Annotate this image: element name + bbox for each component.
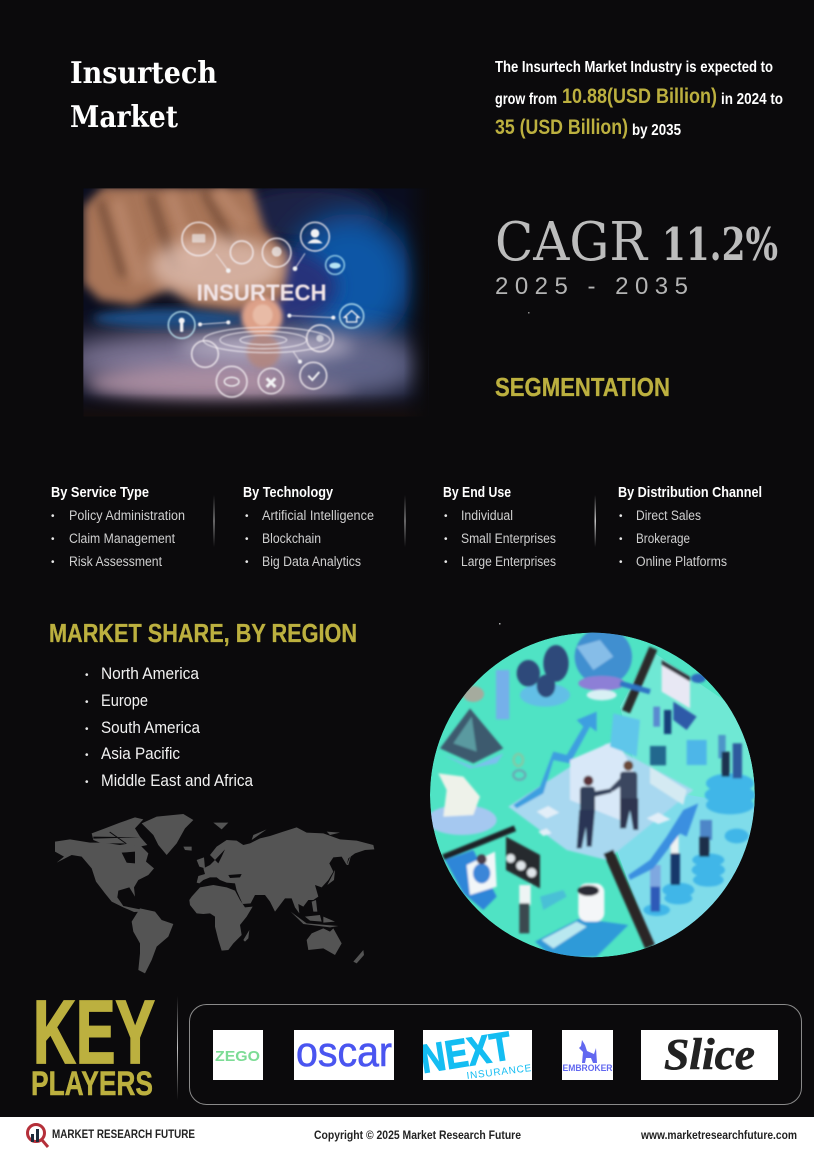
segmentation column: end use: Individual [461,508,513,523]
logo: Next Insurance: INSURANCE [466,1063,532,1082]
bottom-left panels [445,850,497,910]
logo: Slice: Slice [664,1030,755,1079]
world map [55,814,374,973]
people on coins [718,735,726,758]
region list [85,664,253,790]
segmentation column: service type: By Service Type [51,484,149,501]
segmentation column: service type: • [51,511,55,522]
market forecast text: 35 (USD Billion) [495,116,628,139]
logo: Zego [213,1030,263,1080]
segmentation column: technology: Big Data Analytics [262,554,361,569]
logo: Slice [641,1030,778,1080]
region list: North America [101,664,199,683]
handshake figures [580,787,595,813]
footer logo icon [28,1124,48,1147]
small specks [499,623,500,624]
segmentation column: service type: • [51,534,55,545]
mountain [440,708,503,763]
market forecast text: grow from [495,91,557,108]
segmentation column: distribution channel [618,484,762,569]
photo: insurtech hand with icons [57,183,428,417]
segmentation column: distribution channel: • [619,557,623,568]
region list: South America [101,718,200,737]
segmentation column: service type: Policy Administration [69,508,185,523]
logo: Embroker: EMBROKER [562,1063,613,1074]
region list: Asia Pacific [101,744,180,763]
region list: • [85,670,89,681]
CAGR period: 2025 - 2035 [495,273,688,300]
title [70,56,217,135]
region list: Europe [101,691,148,710]
segmentation column: technology: • [245,511,249,522]
illustration: circular isometric business scene [427,628,757,958]
region list: • [85,697,89,708]
board [662,660,690,708]
photo caption: INSURTECH: INSURTECH [197,280,327,306]
logo: Embroker [562,1030,613,1080]
segmentation column: technology: By Technology [243,484,334,501]
segmentation column: service type: • [51,557,55,568]
footer copyright: Copyright © 2025 Market Research Future [314,1128,521,1142]
segmentation column: technology: Artificial Intelligence [262,508,374,523]
market forecast text: by 2035 [632,122,681,139]
segmentation column: distribution channel: By Distribution Channel [618,484,762,501]
segmentation column: end use: Small Enterprises [461,531,556,546]
segmentation column: distribution channel: Direct Sales [636,508,701,523]
segmentation column: service type: Claim Management [69,531,175,546]
thermometer [496,670,509,719]
dark dividers [626,648,653,712]
chain link [514,754,523,766]
segmentation column: end use: • [444,511,448,522]
footer brand: MARKET RESEARCH FUTURE [52,1127,195,1141]
scene platform [427,628,755,958]
market forecast text [495,59,783,139]
CAGR figure: CAGR [495,212,649,273]
segmentation column: end use: • [444,534,448,545]
logo: Zego: ZEGO [215,1048,260,1065]
region list: • [85,724,89,735]
icon circles [168,222,364,397]
globe [574,632,634,680]
arrow graph [513,712,597,808]
region list: Middle East and Africa [101,771,253,790]
segmentation column: service type [51,484,185,569]
segmentation column: technology [243,484,374,569]
segmentation column: end use: By End Use [443,484,511,501]
market forecast text: in 2024 to [721,91,783,108]
segmentation column: distribution channel: • [619,511,623,522]
market forecast text: 10.88(USD Billion) [562,85,717,108]
key players heading [31,983,155,1103]
segmentation column: technology: • [245,557,249,568]
documents [570,740,637,820]
CAGR figure [495,212,778,273]
key players panel [190,1004,802,1104]
trees [520,683,570,707]
segmentation column: distribution channel: Online Platforms [636,554,727,569]
stacked coin platforms [643,773,755,916]
segmentation column: end use: Large Enterprises [461,554,556,569]
segmentation column: distribution channel: Brokerage [636,531,690,546]
papers on platform [537,806,671,836]
footer [0,1117,814,1150]
segmentation column: technology: Blockchain [262,531,321,546]
title: Insurtech [70,56,217,91]
segmentation heading: SEGMENTATION [495,372,670,402]
segmentation column: technology: • [245,534,249,545]
segmentation column: distribution channel: • [619,534,623,545]
region list: • [85,750,89,761]
title: Market [70,100,178,135]
logo: Oscar: oscar [296,1028,392,1075]
segmentation column: service type: Risk Assessment [69,554,162,569]
region list: • [85,777,89,788]
segmentation column: end use [443,484,556,569]
market share heading: MARKET SHARE, BY REGION [49,618,357,648]
key players heading: PLAYERS [31,1065,153,1103]
segmentation column: end use: • [444,557,448,568]
key players heading: KEY [33,983,155,1083]
CAGR figure: 11.2% [662,218,778,271]
robot and tablet [535,918,628,958]
polar bear [427,805,497,835]
